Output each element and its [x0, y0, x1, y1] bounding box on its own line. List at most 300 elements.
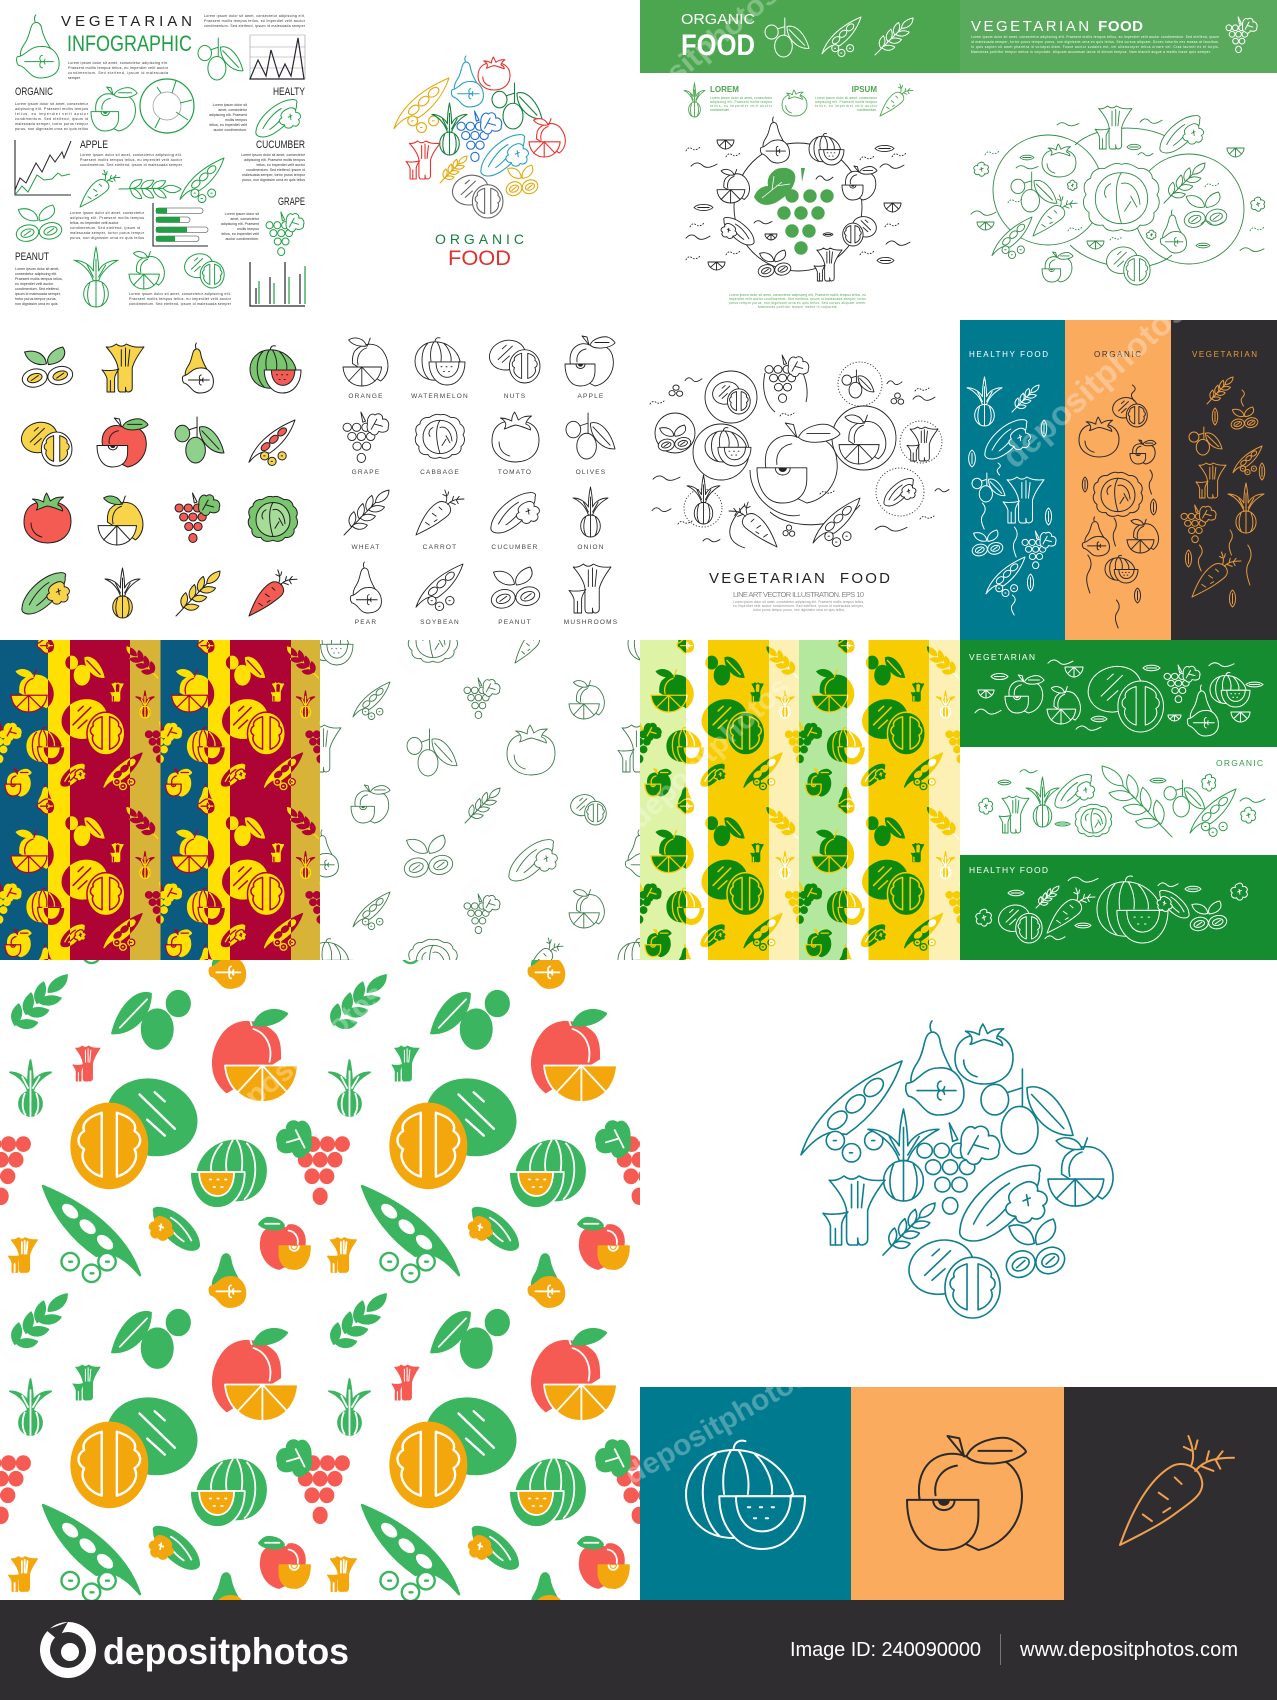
- icon: mushrooms: [569, 564, 611, 613]
- panel: red and yellow stripe pattern: [0, 640, 320, 960]
- text block: onion: non dignissim urna ex quis: [15, 302, 58, 306]
- heading: healty: HEALTY: [273, 86, 305, 98]
- text block: ipsum: condimentum.: [857, 108, 877, 112]
- icon: soybean: [1233, 446, 1262, 475]
- text block: caption: Lorem ipsum dolor sit amet, consectetur adipiscing elit. Praesent mollis tempus tellus, eu: [729, 293, 866, 297]
- icon: peanut: [404, 834, 454, 878]
- text block: lorem: Lorem ipsum dolor sit amet, consectetur: [710, 96, 773, 100]
- icon: apple: [91, 87, 137, 131]
- icon: apple: [1005, 675, 1044, 713]
- text block: caption: eu imperdiet velit auctor condimentum. Sed eleifend, ipsum id malesuada semper,: [733, 604, 864, 608]
- text block: grape: Lorem ipsum dolor sit: [225, 212, 259, 216]
- text block: organic: condimentum. Sed eleifend, ipsum id: [15, 117, 88, 121]
- icon: nuts: [993, 900, 1042, 943]
- label: pear: PEAR: [355, 619, 377, 626]
- icon: grape: [917, 1123, 1000, 1214]
- icon: onion: [432, 103, 467, 155]
- heading: organic: ORGANIC: [1094, 350, 1141, 359]
- text block: intro: [68, 61, 169, 80]
- text block: top right: Lorem ipsum dolor sit amet, consectetur adipiscing elit.: [204, 14, 305, 18]
- icon: carrot: [1047, 888, 1095, 933]
- text block: caption: imperdiet velit auctor condimentum. Sed eleifend, ipsum id malesuada semper, tortor: [729, 297, 867, 301]
- icon: peanut: [1181, 192, 1230, 230]
- label: soybean: SOYBEAN: [420, 619, 460, 626]
- heading: healthy food: HEALTHY FOOD: [969, 350, 1048, 359]
- heading: healthy food: HEALTHY FOOD: [969, 865, 1048, 875]
- text block: healty: adipiscing elit. Praesent: [209, 113, 247, 117]
- text block: apple: [80, 153, 183, 167]
- text block: onion: ipsum id malesuada semper,: [15, 292, 61, 296]
- text block: grape: tellus, eu imperdiet velit: [221, 232, 259, 236]
- label: cucumber: CUCUMBER: [491, 544, 539, 551]
- icon: olives: [981, 1069, 1073, 1154]
- text block: peanut: Lorem ipsum dolor sit amet, consectetur: [70, 211, 145, 215]
- text block: healty: auctor condimentum.: [213, 128, 247, 132]
- icon: peanut: [19, 347, 76, 391]
- label: carrot: CARROT: [423, 544, 457, 551]
- icon: grape: [175, 493, 220, 542]
- panel: vegetarian food header banner: [960, 0, 1277, 73]
- text block: [971, 35, 1219, 54]
- icon: carrot: [249, 570, 297, 616]
- icon: watermelon: [705, 428, 751, 466]
- icon: carrot: [880, 84, 913, 116]
- text block: top right: condimentum. Sed eleifend, ipsum id malesuada semper: [204, 24, 306, 28]
- icon: tomato: [1079, 417, 1119, 457]
- icon: wheat: [1036, 886, 1059, 908]
- text block: peanut: purus, non dignissim urna ex quis tellus: [70, 236, 144, 240]
- icon: grape: [464, 678, 500, 719]
- icon: watermelon: [250, 346, 301, 393]
- icon: tomato: [507, 725, 555, 775]
- icon: wheat: [176, 571, 220, 616]
- icon: pear: [1187, 685, 1218, 736]
- text block: intro: Lorem ipsum dolor sit amet, consectetur adipiscing elit.: [68, 61, 168, 65]
- icon: nuts: [570, 794, 607, 826]
- text block: apple: Praesent mollis tempus tellus, eu imperdiet velit auctor: [80, 158, 183, 162]
- text block: lorem: condimentum.: [710, 108, 730, 112]
- icon: apple: [351, 785, 390, 823]
- icon: grape: [457, 111, 502, 161]
- icon: watermelon: [686, 1441, 805, 1549]
- icon: pear: [760, 117, 789, 163]
- icon: peanut: [756, 250, 793, 279]
- text block: cucumber: purus, non dignissim urna ex quis tellus: [242, 178, 305, 182]
- logo icon: [40, 1622, 96, 1678]
- icon: orange: [98, 496, 143, 545]
- icon: orange: [529, 119, 565, 157]
- icon: tomato: [782, 90, 807, 116]
- subtitle: LINE ART VECTOR ILLUSTRATION. EPS 10: [733, 590, 864, 599]
- text block: ipsum: [815, 96, 878, 112]
- icon: mushroom: [1095, 106, 1132, 149]
- heading: vegetarian: VEGETARIAN: [969, 652, 1035, 662]
- text block: cucumber: tellus, eu imperdiet velit auctor: [256, 163, 306, 167]
- text block: Maecenas porttitor tempor metus in vulputate. Aliquam accumsan lacus id dictum tempus. Nam blandit augue a mattis fusce quis semper.: [971, 50, 1211, 54]
- heading: vegetarian food: VEGETARIAN FOOD: [971, 18, 1143, 35]
- icon: soybean: [416, 564, 463, 611]
- label: mushrooms: MUSHROOMS: [564, 619, 618, 626]
- icon: apple: [842, 166, 877, 200]
- panel: labeled line icons: [343, 335, 618, 626]
- icon: nuts: [15, 416, 72, 466]
- heading: organic: ORGANIC: [1216, 758, 1263, 768]
- icon: pear: [17, 15, 59, 78]
- icon: orange: [129, 252, 164, 289]
- text block: healty: tellus, eu imperdiet velit: [209, 123, 247, 127]
- icon: carrot: [1033, 195, 1077, 236]
- text block: apple: condimentum. Sed eleifend, ipsum id malesuada semper: [80, 163, 183, 167]
- icon: tomato: [1042, 144, 1076, 177]
- icon: cucumber: [721, 217, 754, 245]
- icon: grape: [765, 355, 809, 403]
- icon: orange: [1048, 1138, 1113, 1206]
- text block: lorem: tellus, eu imperdiet velit auctor: [710, 104, 773, 108]
- icon: tomato: [24, 493, 71, 543]
- line chart: peaks: [250, 35, 305, 79]
- panel: colored icons: [15, 343, 301, 618]
- icon: watermelon: [1097, 876, 1168, 943]
- icon: wheat: [875, 18, 913, 55]
- panel: grape circle diagram: [684, 83, 913, 309]
- icon: olives: [972, 473, 1005, 502]
- text block: lorem: adipiscing elit. Praesent mollis tempus: [710, 100, 772, 104]
- icon: peanut: [970, 530, 1005, 558]
- icon: apple: [1042, 252, 1073, 282]
- text block: peanut: tellus, eu imperdiet velit auctor: [70, 221, 119, 225]
- icon: wheat: [883, 1203, 935, 1255]
- icon: pear: [182, 343, 213, 393]
- icon: nuts: [898, 1230, 1000, 1318]
- text block: ipsum: Lorem ipsum dolor sit amet, consectetur: [815, 96, 878, 100]
- label: nuts: NUTS: [504, 393, 526, 400]
- icon: apple: [1130, 440, 1156, 464]
- text block: onion: eu imperdiet velit auctor: [15, 282, 54, 286]
- text block: grape: [221, 212, 260, 241]
- icon: olives: [492, 83, 542, 129]
- icon: orange: [839, 415, 886, 464]
- line chart: rising: [15, 140, 71, 195]
- icon: peanut: [504, 165, 540, 198]
- watermarks: depositphotos: [995, 291, 1194, 476]
- icon: grape: [1022, 531, 1056, 569]
- heading: organic: ORGANIC: [681, 11, 755, 28]
- icon: mushroom: [907, 427, 938, 461]
- text block: organic: Lorem ipsum dolor sit amet, consectetur: [15, 102, 89, 106]
- text block: Lorem ipsum dolor sit amet, consectetur adipiscing elit. Praesent mollis tempus tellus, eu imperdiet velit auctor condimentum. Sed eleifend, ipsum: [971, 35, 1219, 39]
- icon: soybean: [813, 498, 860, 547]
- text block: grape: adipiscing elit. Praesent: [221, 222, 259, 226]
- icon: apple: [565, 336, 615, 386]
- text block: apple: Lorem ipsum dolor sit amet, consectetur adipiscing elit.: [80, 153, 182, 157]
- icon: peanut: [1002, 1219, 1069, 1282]
- icon: watermelon: [415, 338, 465, 385]
- title: infographic: INFOGRAPHIC: [67, 31, 192, 56]
- icon: carrot: [416, 490, 464, 535]
- icon: orange: [569, 681, 604, 719]
- panel: healthy food banner: [960, 855, 1277, 960]
- icon: cucumber: [22, 573, 69, 614]
- icon: wheat: [1012, 385, 1039, 412]
- icon: cucumber: [491, 493, 539, 533]
- panel: watermelon tile: [640, 1387, 851, 1600]
- text block: caption: tortor purus tempor purus, non dignissim urna ex quis tellus.: [753, 608, 845, 612]
- icon: wheat: [1207, 377, 1233, 404]
- icon: cucumber: [1160, 116, 1204, 153]
- text block: bottom: [129, 292, 232, 306]
- icon: grape: [343, 412, 389, 462]
- text block: grape: mollis tempus: [237, 227, 259, 231]
- text block: bottom: condimentum. Sed eleifend, ipsum id malesuada semper: [129, 302, 232, 306]
- icon: cabbage: [1083, 163, 1159, 231]
- donut chart: [140, 79, 194, 133]
- text block: lorem: [710, 96, 773, 112]
- icon: wheat: [440, 156, 467, 183]
- heading: grape: GRAPE: [278, 196, 305, 208]
- panel: healthy food teal column: [960, 320, 1065, 640]
- icon: mushroom: [1003, 477, 1044, 523]
- icon: olives: [842, 370, 874, 398]
- icon: mushroom: [823, 1176, 885, 1245]
- icon: onion: [1228, 483, 1264, 533]
- panel: organic orange column: [1065, 320, 1171, 640]
- icon: olives: [1011, 172, 1057, 212]
- icon: solid grape: [754, 168, 834, 255]
- text block: onion: tortor purus tempor purus,: [15, 297, 57, 301]
- heading: peanut: PEANUT: [15, 251, 49, 263]
- text block: cucumber: Lorem ipsum dolor sit amet, consectetur: [241, 153, 306, 157]
- text block: peanut: [70, 211, 145, 240]
- text block: healty: amet, consectetur: [218, 108, 248, 112]
- panel: apple tile: [851, 1387, 1064, 1600]
- icon: carrot: [80, 170, 120, 207]
- label: onion: ONION: [577, 544, 605, 551]
- heading: food: FOOD: [681, 29, 755, 62]
- icon: cucumber: [884, 478, 916, 506]
- text block: peanut: malesuada semper, tortor purus tempor: [70, 231, 145, 235]
- panel: carrot tile: [1064, 1387, 1277, 1600]
- text block: healty: Lorem ipsum dolor sit: [213, 103, 247, 107]
- icon: pear: [1160, 210, 1187, 253]
- watermarks: depositphotos: [619, 1359, 814, 1491]
- text block: bottom: Lorem ipsum dolor sit amet, consectetur adipiscing elit.: [129, 292, 231, 296]
- icon: wheat: [119, 158, 181, 220]
- icon: cucumber: [960, 1165, 1047, 1241]
- icon: nuts: [843, 213, 880, 246]
- icon: nuts: [1079, 658, 1163, 732]
- icon: olives: [566, 413, 615, 459]
- icon: cucumber: [256, 100, 301, 137]
- label: cabbage: CABBAGE: [420, 469, 460, 476]
- icon: onion: [687, 475, 720, 524]
- icon: watermelon: [1105, 555, 1138, 583]
- text block: onion: Lorem ipsum dolor sit amet,: [15, 267, 59, 271]
- text block: intro: condimentum. Sed eleifend, ipsum id malesuada: [68, 71, 168, 75]
- text block: organic: [15, 102, 89, 131]
- icon: grape: [1164, 665, 1200, 703]
- text block: caption: purus tempor purus, non dignissim urna ex quis tellus. Sed cursus aliquam lorem.: [729, 301, 866, 305]
- icon: onion: [573, 487, 608, 537]
- bar chart: horizontal: [153, 203, 208, 246]
- text block: cucumber: adipiscing elit. Praesent mollis tempus: [244, 158, 305, 162]
- panel: organic food header banner: [640, 0, 960, 73]
- text block: organic: purus, non dignissim urna ex quis tellus: [15, 127, 88, 131]
- icon: olives: [1189, 427, 1222, 455]
- icon: cucumber: [985, 420, 1030, 459]
- icon: mushroom: [814, 248, 842, 281]
- panel: organic food logo: [394, 56, 565, 270]
- heading: vegetarian: VEGETARIAN: [1192, 350, 1257, 359]
- heading: ipsum: IPSUM: [852, 85, 877, 94]
- icon: nuts: [1101, 242, 1150, 285]
- icon: orange: [1047, 687, 1080, 724]
- icon: nuts: [483, 335, 540, 383]
- label: apple: APPLE: [578, 393, 604, 400]
- heading: apple: APPLE: [80, 139, 108, 151]
- text block: caption: [733, 600, 864, 612]
- icon: soybean: [986, 557, 1025, 597]
- label: watermelon: WATERMELON: [411, 393, 469, 400]
- icon: nuts: [1108, 394, 1147, 427]
- icon: grape: [1226, 17, 1257, 53]
- icon: cabbage: [1093, 472, 1142, 516]
- text block: intro: semper.: [68, 76, 81, 80]
- icon: cucumber: [1157, 890, 1189, 918]
- text block: id malesuada semper, tortor purus tempor purus, non dignissim urna ex quis tellus. Sed cursus aliquam. Donec lobortis nec massa at faucibus.: [971, 40, 1219, 44]
- panel: vegetarian infographic: [13, 13, 306, 307]
- icon: cucumber: [509, 840, 557, 881]
- text block: caption: [729, 293, 867, 309]
- icon: peanut: [1188, 901, 1229, 933]
- text block: top right: [204, 14, 306, 28]
- heading: food: FOOD: [448, 247, 511, 270]
- panel: vegetarian food black line: [650, 355, 949, 612]
- image id: Image ID: 240090000: [790, 1639, 981, 1661]
- icon: pear: [906, 1021, 964, 1115]
- icon: soybean: [992, 217, 1032, 259]
- icon: mushroom: [102, 344, 144, 392]
- icon: tomato: [492, 412, 539, 462]
- watermarks: depositphotos: [211, 977, 391, 1135]
- icon: peanut: [13, 205, 65, 244]
- icon: onion: [967, 377, 1002, 426]
- text block: healty: mollis tempus: [225, 118, 247, 122]
- icon: nuts: [180, 249, 224, 288]
- icon: soybean: [353, 682, 390, 720]
- website: www.depositphotos.com: [1019, 1639, 1238, 1661]
- icon: orange: [717, 169, 750, 203]
- icon: soybean: [801, 1061, 902, 1162]
- icon: soybean: [822, 17, 861, 57]
- label: orange: ORANGE: [348, 393, 384, 400]
- icon: grape: [266, 212, 304, 256]
- icon: soybean: [1190, 789, 1236, 837]
- title: vegetarian: VEGETARIAN: [61, 13, 192, 30]
- icon: wheat: [1102, 766, 1172, 837]
- text block: grape: amet, consectetur: [230, 217, 260, 221]
- text block: onion: [15, 267, 63, 306]
- panel: colorful seamless pattern: [0, 960, 640, 1600]
- panel: vegetarian banner: [960, 640, 1277, 747]
- icon: wheat: [344, 490, 389, 535]
- label: olives: OLIVES: [576, 469, 606, 476]
- text block: intro: Praesent mollis tempus tellus, eu imperdiet velit auctor: [68, 66, 169, 70]
- label: wheat: WHEAT: [352, 544, 380, 551]
- text block: onion: condimentum. Sed eleifend,: [15, 287, 60, 291]
- icon: onion: [868, 1109, 939, 1201]
- icon: olives: [175, 417, 224, 463]
- icon: pear: [451, 56, 483, 107]
- icon: large apple: [757, 423, 840, 503]
- heading: lorem: LOREM: [710, 85, 739, 94]
- icon: cabbage: [1075, 804, 1112, 837]
- panel: vegetarian dark column: [1171, 320, 1277, 640]
- icon: mushroom: [1196, 463, 1226, 498]
- panel: line icon pattern: [320, 640, 640, 960]
- heading: organic: ORGANIC: [15, 86, 53, 98]
- text block: grape: auctor condimentum.: [225, 237, 259, 241]
- label: grape: GRAPE: [352, 469, 380, 476]
- icon: apple: [97, 418, 148, 467]
- heading: vegetarian food: VEGETARIAN FOOD: [709, 570, 890, 587]
- icon: wheat: [465, 788, 500, 823]
- icon: carrot: [1120, 1436, 1234, 1545]
- panel: organic banner: [979, 758, 1265, 837]
- panel: teal food logo: [801, 1021, 1113, 1318]
- text block: top right: Praesent mollis tempus tellus, eu imperdiet velit auctor: [204, 19, 306, 23]
- label: tomato: TOMATO: [498, 469, 532, 476]
- text block: onion: consectetur adipiscing elit.: [15, 272, 57, 276]
- text block: cucumber: [241, 153, 306, 182]
- icon: tomato: [478, 57, 510, 90]
- text block: organic: tellus, eu imperdiet velit auctor: [15, 112, 89, 116]
- text block: ipsum: tellus, eu imperdiet velit auctor: [815, 104, 878, 108]
- icon: olives: [407, 729, 457, 776]
- text block: ipsum: adipiscing elit. Praesent mollis tempus: [815, 100, 877, 104]
- text block: caption: Maecenas porttitor tempor metus in vulputate.: [758, 305, 838, 309]
- icon: nuts: [446, 170, 503, 218]
- icon: carrot: [729, 502, 777, 547]
- icon: tomato: [955, 1024, 1013, 1084]
- text block: organic: adipiscing elit. Praesent mollis tempus: [15, 107, 88, 111]
- icon: mushroom: [320, 724, 342, 772]
- label: peanut: PEANUT: [498, 619, 532, 626]
- watermarks: [211, 0, 1194, 1491]
- panel: green line composition: [971, 106, 1265, 285]
- icon: pear: [350, 562, 381, 613]
- icon: olives: [198, 38, 243, 80]
- text block: organic: malesuada semper, tortor purus tempor: [15, 122, 89, 126]
- text block: caption: Lorem ipsum dolor sit amet, consectetur adipiscing elit. Praesent mollis tempus tellus,: [733, 600, 864, 604]
- icon: pear: [1082, 517, 1109, 556]
- text block: In quis sapien sit amet pharetra id volutpat diam. Fusce auctor sodales est, vel ullamcorper tellus ornare vel. Cras laoreet ex et turpis.: [971, 45, 1219, 49]
- heading: organic: ORGANIC: [435, 231, 524, 247]
- icon: soybean: [394, 78, 449, 132]
- icon: olives: [765, 18, 809, 57]
- icon: orange: [343, 338, 388, 386]
- text block: cucumber: condimentum. Sed eleifend, ipsum id: [246, 168, 305, 172]
- panel: green and gold stripe pattern: [640, 640, 960, 960]
- icon: apple: [907, 1436, 1026, 1550]
- icon: watermelon: [1210, 673, 1250, 707]
- watermarks: depositphotos: [622, 670, 796, 835]
- heading: cucumber: CUCUMBER: [256, 139, 305, 151]
- icon: nuts: [708, 377, 750, 414]
- icon: peanut: [656, 425, 693, 453]
- bar chart: vertical: [250, 262, 305, 306]
- icon: onion: [1026, 777, 1059, 827]
- icon: watermelon: [809, 133, 844, 165]
